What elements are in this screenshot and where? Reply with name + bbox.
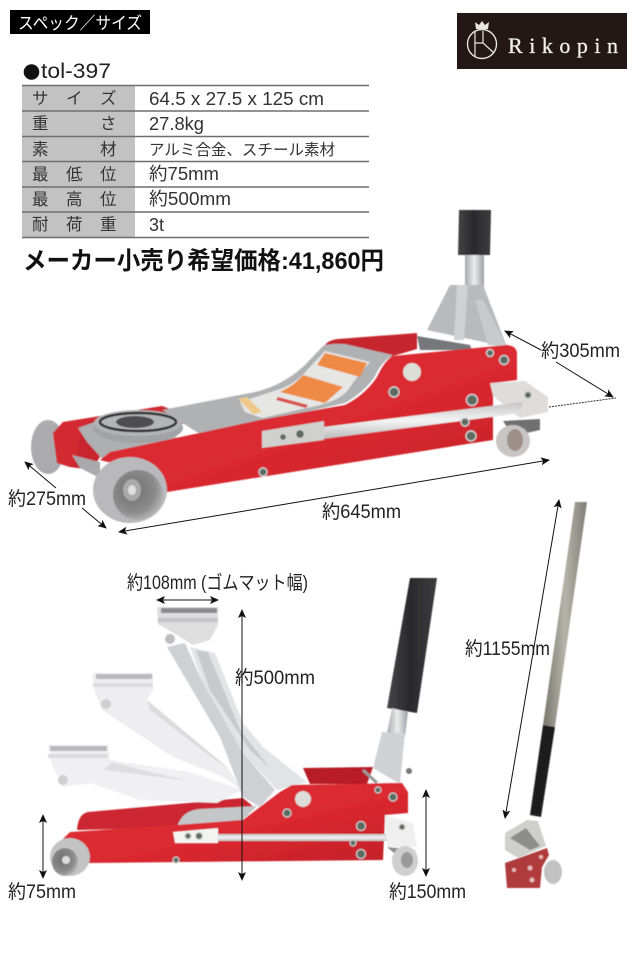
row: capacity: 荷 bbox=[66, 215, 82, 234]
row: highest: 高 bbox=[66, 190, 82, 209]
caster bbox=[387, 847, 415, 858]
gray slot bbox=[178, 806, 257, 826]
row: weight bbox=[32, 114, 204, 134]
row: highest bbox=[32, 189, 231, 209]
socket bbox=[490, 381, 548, 418]
gauge bbox=[403, 363, 421, 381]
handle base bbox=[427, 285, 507, 347]
dimension: 645mm bbox=[119, 460, 549, 532]
dimension: 275mm bbox=[8, 462, 106, 528]
dimension: 500mm: 約500mm bbox=[235, 667, 315, 689]
far wheel bbox=[31, 420, 65, 474]
dimension: 1155mm bbox=[465, 500, 559, 818]
jack photo: three-quarter view bbox=[31, 210, 548, 523]
high saddle bbox=[157, 607, 218, 645]
row: size bbox=[32, 89, 324, 109]
handle shaft bbox=[543, 502, 587, 727]
dimension: 75mm: 約75mm bbox=[8, 881, 76, 903]
row: highest: 最 bbox=[32, 191, 48, 209]
caster bbox=[503, 419, 540, 436]
red body bbox=[505, 848, 549, 888]
dimension: 645mm: 約645mm bbox=[322, 501, 401, 523]
grip bbox=[530, 725, 555, 817]
row: material: アルミ合金、スチール素材 bbox=[149, 141, 335, 159]
row: lowest: 最 bbox=[32, 166, 48, 184]
row: material: 素 bbox=[32, 140, 48, 159]
handle tube bbox=[465, 255, 484, 288]
row: highest: 約500mm bbox=[149, 189, 231, 209]
block under saddle bbox=[78, 420, 180, 462]
row: weight: 27.8kg bbox=[149, 114, 204, 134]
caster bbox=[544, 860, 562, 884]
model number: tol-397 bbox=[41, 60, 111, 83]
bolts bbox=[259, 350, 532, 476]
row: weight: 重 bbox=[32, 114, 48, 133]
row: capacity: 重 bbox=[100, 215, 116, 234]
clamp plate bbox=[262, 421, 324, 448]
dimension: 108mm rubber mat width: 約108mm (ゴムマット幅) bbox=[127, 572, 308, 594]
base bbox=[373, 732, 405, 784]
front wheel bbox=[50, 838, 90, 876]
heading tag: spec and size: スペック／サイズ bbox=[18, 14, 142, 33]
row: highest: 位 bbox=[100, 190, 116, 209]
collar and base bbox=[505, 820, 546, 858]
dimension: 1155mm: 約1155mm bbox=[465, 638, 550, 660]
lifting rod bbox=[323, 402, 522, 439]
far side red bbox=[53, 406, 200, 470]
back red plate bbox=[77, 798, 255, 830]
row: size: イ bbox=[66, 90, 82, 108]
row: weight: さ bbox=[100, 114, 116, 133]
saddle bbox=[93, 413, 183, 443]
row: capacity: 3t bbox=[149, 215, 164, 235]
socket bbox=[385, 815, 417, 847]
dimension: 275mm: 約275mm bbox=[8, 488, 86, 510]
logo: Rikopin bbox=[457, 13, 627, 69]
handle grip bbox=[458, 210, 491, 255]
dimension: 150mm bbox=[389, 790, 466, 903]
gauge bbox=[295, 791, 311, 807]
clamp plate bbox=[173, 828, 218, 843]
dimension: 75mm bbox=[8, 815, 76, 903]
logo: Rikopin: Rikopin bbox=[508, 33, 618, 58]
back red plate far end bbox=[303, 767, 373, 784]
grip bbox=[387, 578, 437, 713]
price: メーカー小売り希望価格:41,860円 bbox=[23, 247, 384, 275]
mid position saddle and arm bbox=[92, 673, 242, 790]
row: size: サ bbox=[32, 90, 48, 108]
row: capacity: 耐 bbox=[32, 215, 48, 234]
back wall bbox=[323, 333, 417, 380]
row: size: 64.5 x 27.5 x 125 cm bbox=[149, 89, 324, 109]
low position saddle and arm bbox=[48, 745, 242, 803]
row: lowest: 位 bbox=[100, 165, 116, 184]
red side plate bbox=[100, 345, 517, 492]
tube bbox=[387, 708, 408, 737]
high position rear arm bbox=[190, 647, 307, 790]
top plate bbox=[162, 344, 393, 434]
lifting rod bbox=[215, 834, 387, 841]
row: lowest: 低 bbox=[66, 165, 83, 184]
row: material: 材 bbox=[100, 140, 116, 159]
side plate bbox=[62, 783, 408, 863]
lever bbox=[363, 770, 377, 783]
row: capacity bbox=[32, 215, 164, 235]
jack photo: side view with raised positions bbox=[48, 578, 437, 876]
row: lowest bbox=[32, 164, 219, 184]
jack photo: long handle bbox=[505, 502, 587, 888]
dimension: 305mm bbox=[505, 331, 620, 407]
dimension: 305mm: 約305mm bbox=[541, 340, 620, 362]
front wheel bbox=[93, 457, 167, 523]
spec table bbox=[22, 85, 369, 238]
orange labels bbox=[317, 353, 367, 377]
row: size: ズ bbox=[100, 89, 116, 108]
bolts bbox=[173, 787, 405, 863]
row: material bbox=[32, 140, 335, 159]
dimension: 150mm: 約150mm bbox=[389, 881, 466, 903]
high position main arm bbox=[167, 643, 275, 807]
row: lowest: 約75mm bbox=[149, 164, 219, 184]
